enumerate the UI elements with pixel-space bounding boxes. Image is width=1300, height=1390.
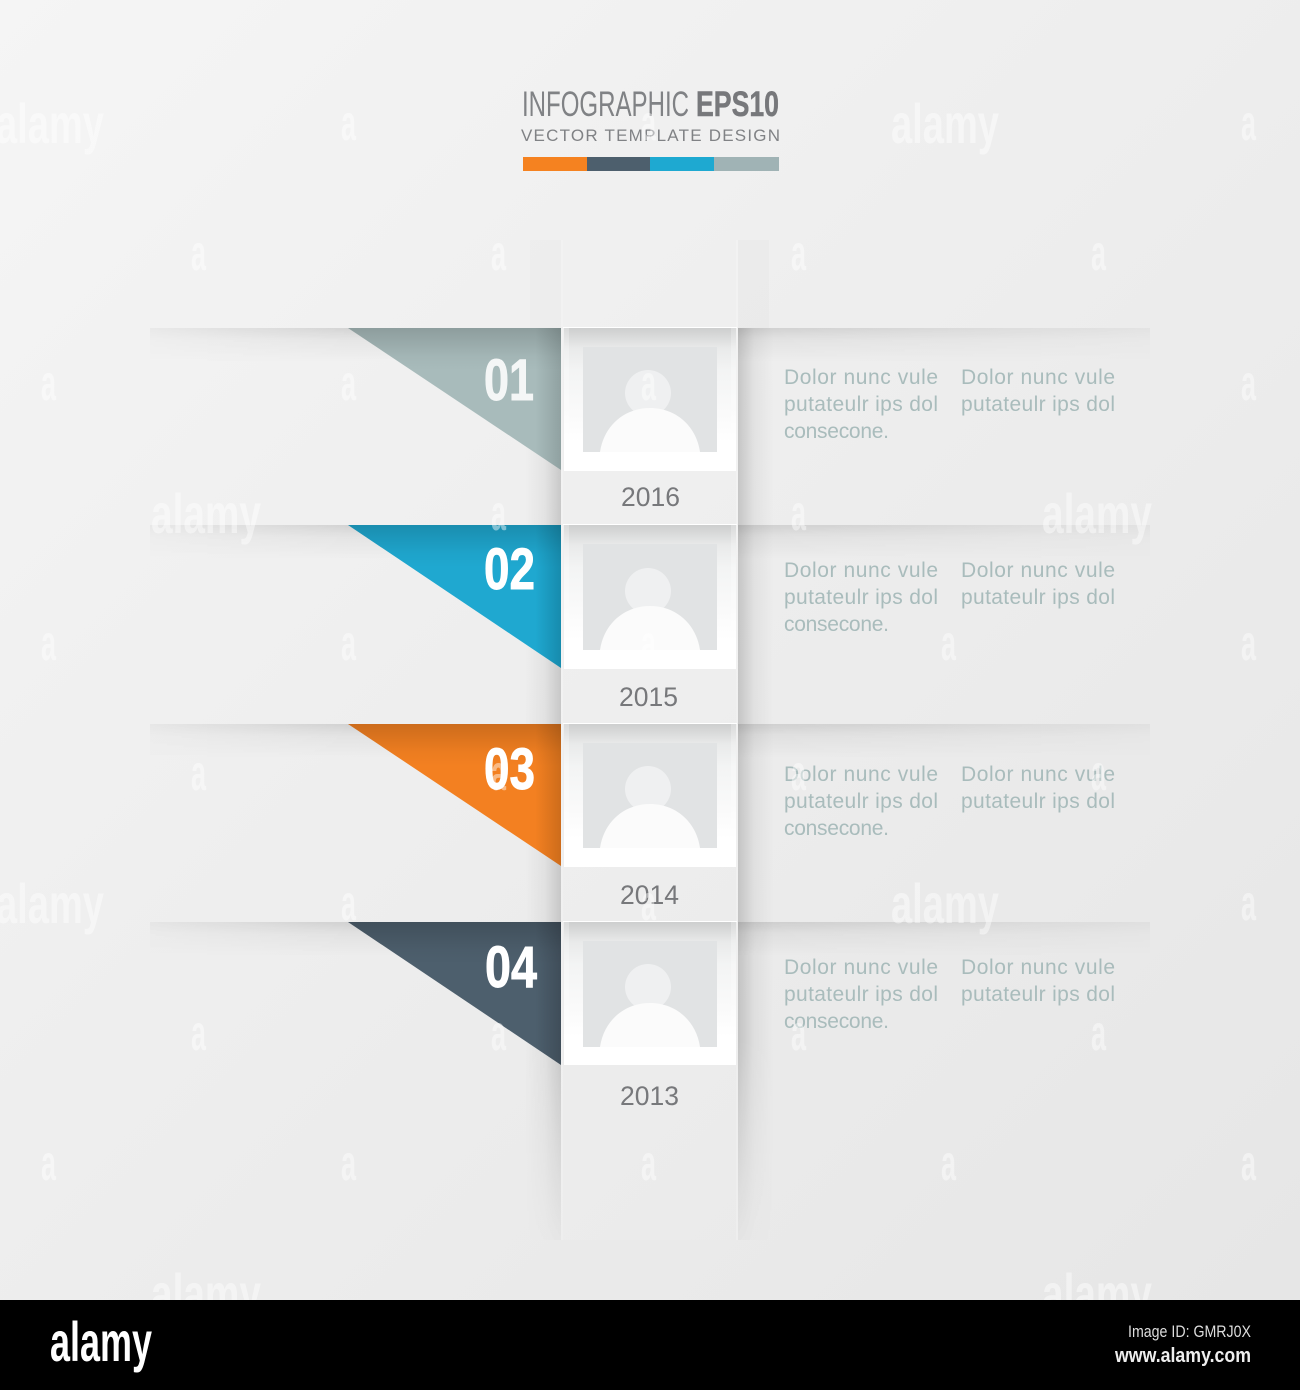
text block left: putateulr ips dol [784, 983, 938, 1006]
text block left: putateulr ips dol [784, 586, 938, 609]
watermarks: a [491, 485, 507, 541]
watermarks: a [1241, 95, 1257, 151]
text block right: Dolor nunc vule [961, 763, 1115, 786]
text block right: putateulr ips dol [961, 790, 1115, 813]
text block left: putateulr ips dol [784, 790, 938, 813]
text block left: Dolor nunc vule [784, 956, 938, 979]
panel: step 04 [348, 921, 1115, 1111]
watermarks: a [191, 225, 207, 281]
watermarks: alamy [1042, 1262, 1152, 1325]
watermarks: a [41, 1135, 57, 1191]
website: www.alamy.com [1114, 1345, 1251, 1367]
panel: step 03 [348, 723, 1115, 910]
panel: step 01 [348, 327, 1115, 512]
text block right: Dolor nunc vule [961, 366, 1115, 389]
watermarks: alamy [0, 872, 104, 935]
footer logo: alamy [50, 1310, 152, 1373]
watermarks: alamy [151, 1262, 261, 1325]
text block right: putateulr ips dol [961, 586, 1115, 609]
title line: eps10: EPS10 [696, 85, 779, 124]
horizontal band shadows [150, 328, 1150, 1240]
watermarks: a [641, 355, 657, 411]
watermarks: a [341, 95, 357, 151]
photo frame [563, 723, 737, 867]
triangle: blue [348, 525, 561, 668]
watermarks: a [1241, 615, 1257, 671]
watermarks: a [341, 615, 357, 671]
watermarks: a [791, 745, 807, 801]
text block left: consecone. [784, 613, 889, 636]
text block left: Dolor nunc vule [784, 366, 938, 389]
watermarks: a [1091, 225, 1107, 281]
text block right: putateulr ips dol [961, 983, 1115, 1006]
year 2015: 2015 [619, 682, 678, 712]
watermarks: a [641, 875, 657, 931]
watermarks: a [641, 95, 657, 151]
column and side shadows [530, 240, 769, 1240]
watermarks: a [491, 745, 507, 801]
watermarks: a [41, 355, 57, 411]
text block left: consecone. [784, 817, 889, 840]
watermarks: a [41, 615, 57, 671]
year 2013: 2013 [620, 1081, 679, 1111]
footer bar [0, 1300, 1300, 1390]
number 01: 01 [484, 348, 534, 413]
watermarks: a [341, 355, 357, 411]
watermarks: a [641, 615, 657, 671]
year 2014: 2014 [620, 880, 679, 910]
watermarks: alamy [0, 92, 104, 155]
watermarks: alamy [151, 482, 261, 545]
watermarks: a [791, 1005, 807, 1061]
watermarks: a [791, 485, 807, 541]
text block left: consecone. [784, 1010, 889, 1033]
watermarks: a [791, 225, 807, 281]
watermarks: a [491, 1005, 507, 1061]
photo frame [563, 524, 737, 669]
title [521, 85, 780, 171]
watermarks: a [1091, 1005, 1107, 1061]
watermarks: a [341, 875, 357, 931]
watermarks: a [341, 1135, 357, 1191]
colour bar [523, 157, 779, 171]
watermarks: a [1091, 745, 1107, 801]
panel: step 02 [348, 524, 1115, 712]
watermarks: alamy [1042, 482, 1152, 545]
watermarks: a [191, 745, 207, 801]
year 2016: 2016 [621, 482, 680, 512]
number 04: 04 [485, 935, 537, 1000]
text block right: Dolor nunc vule [961, 956, 1115, 979]
subtitle: VECTOR TEMPLATE DESIGN [521, 126, 780, 145]
image id: Image ID: GMRJ0X [1128, 1322, 1251, 1341]
number 02: 02 [484, 537, 535, 602]
triangle: gray [348, 328, 561, 470]
triangle: navy [348, 922, 561, 1065]
watermarks: a [941, 615, 957, 671]
watermarks: a [191, 1005, 207, 1061]
text block right: Dolor nunc vule [961, 559, 1115, 582]
watermarks: alamy [891, 92, 999, 155]
text block left: Dolor nunc vule [784, 559, 938, 582]
text block left: putateulr ips dol [784, 393, 938, 416]
watermarks: a [941, 1135, 957, 1191]
watermarks: a [1241, 875, 1257, 931]
text block left: Dolor nunc vule [784, 763, 938, 786]
text block right: putateulr ips dol [961, 393, 1115, 416]
watermarks: a [1241, 1135, 1257, 1191]
watermarks: a [491, 225, 507, 281]
photo frame [563, 327, 737, 471]
text block left: consecone. [784, 420, 889, 443]
watermarks: alamy [891, 872, 999, 935]
title line: infographic: INFOGRAPHIC [522, 85, 689, 124]
triangle: orange [348, 724, 561, 866]
watermarks: a [641, 1135, 657, 1191]
number 03: 03 [484, 737, 535, 802]
photo frame [563, 921, 737, 1065]
watermarks: a [1241, 355, 1257, 411]
